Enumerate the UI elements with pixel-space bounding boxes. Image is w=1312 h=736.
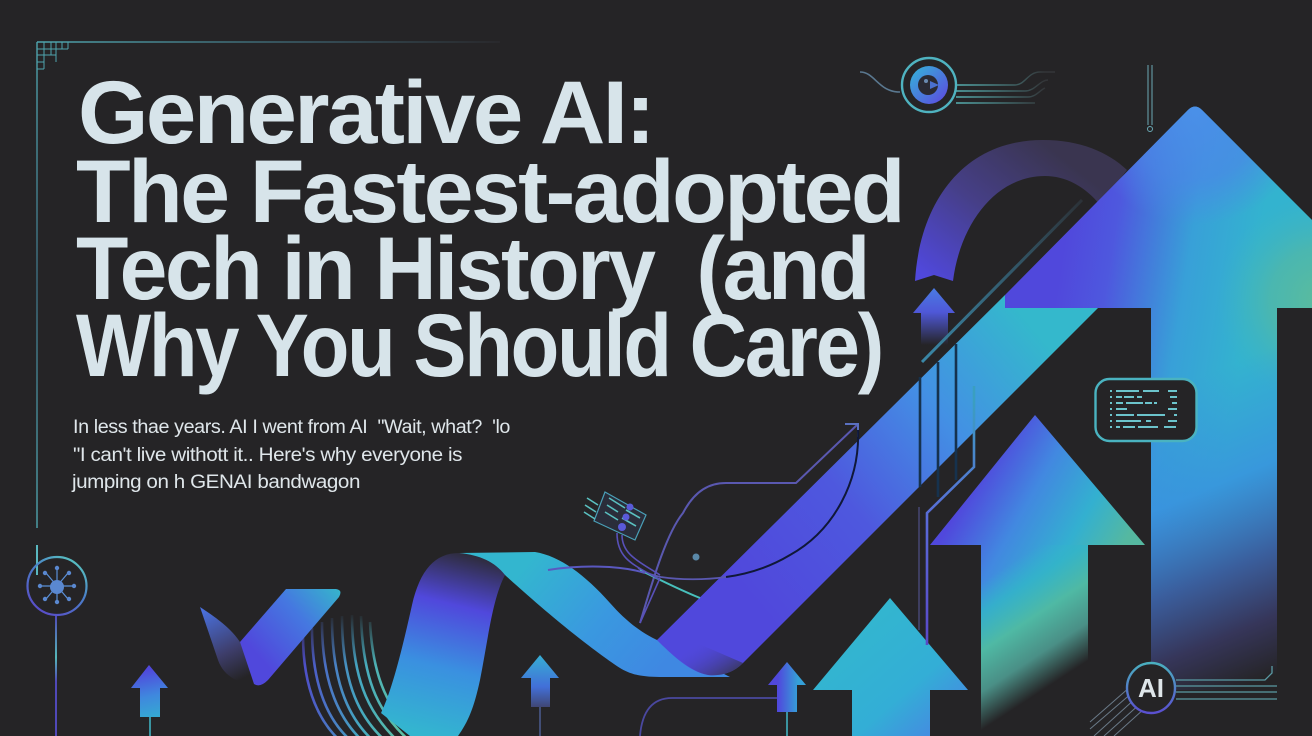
dot: [692, 554, 700, 560]
arc arrow: [915, 140, 1127, 281]
small arrow under arc: [913, 288, 955, 346]
arrow: bottom right with curve: [640, 662, 806, 736]
diagonal accent line: [922, 200, 1082, 362]
arrow line: [638, 424, 858, 623]
icon: data card: [548, 492, 660, 623]
corner frame: [37, 42, 500, 528]
icon: AI badge: [1090, 663, 1277, 736]
middle arrow: [925, 410, 1150, 736]
title: [76, 62, 903, 395]
icon: network node: [28, 545, 86, 736]
big arrow: [1000, 100, 1312, 700]
diagonal band: [657, 295, 1098, 675]
title: Tech in History (and: [76, 218, 868, 318]
arrow: bottom left: [131, 665, 168, 736]
title: Generative AI:: [78, 62, 653, 162]
subtitle: jumping on h GENAI bandwagon: [71, 472, 360, 493]
circuit lines on band: [919, 344, 974, 645]
check mark: [200, 589, 340, 685]
title: The Fastest-adopted: [76, 141, 903, 241]
title: Why You Should Care): [76, 295, 882, 395]
arrow: bottom center: [521, 655, 559, 736]
icon: top circuit node: [860, 58, 1055, 112]
small teal arrow: [813, 598, 968, 736]
ribbon: [381, 552, 730, 736]
icon: hanging pin line: [1148, 65, 1152, 132]
subtitle: "I can't live withott it.. Here's why everyone is: [73, 445, 462, 466]
terminal card: [1096, 379, 1196, 441]
wave lines: [298, 610, 422, 736]
icon: AI badge: AI: [1138, 673, 1164, 703]
subtitle: In less thae years. AI I went from AI "Wait, what? 'lo: [73, 417, 510, 438]
subtitle: [71, 417, 510, 493]
